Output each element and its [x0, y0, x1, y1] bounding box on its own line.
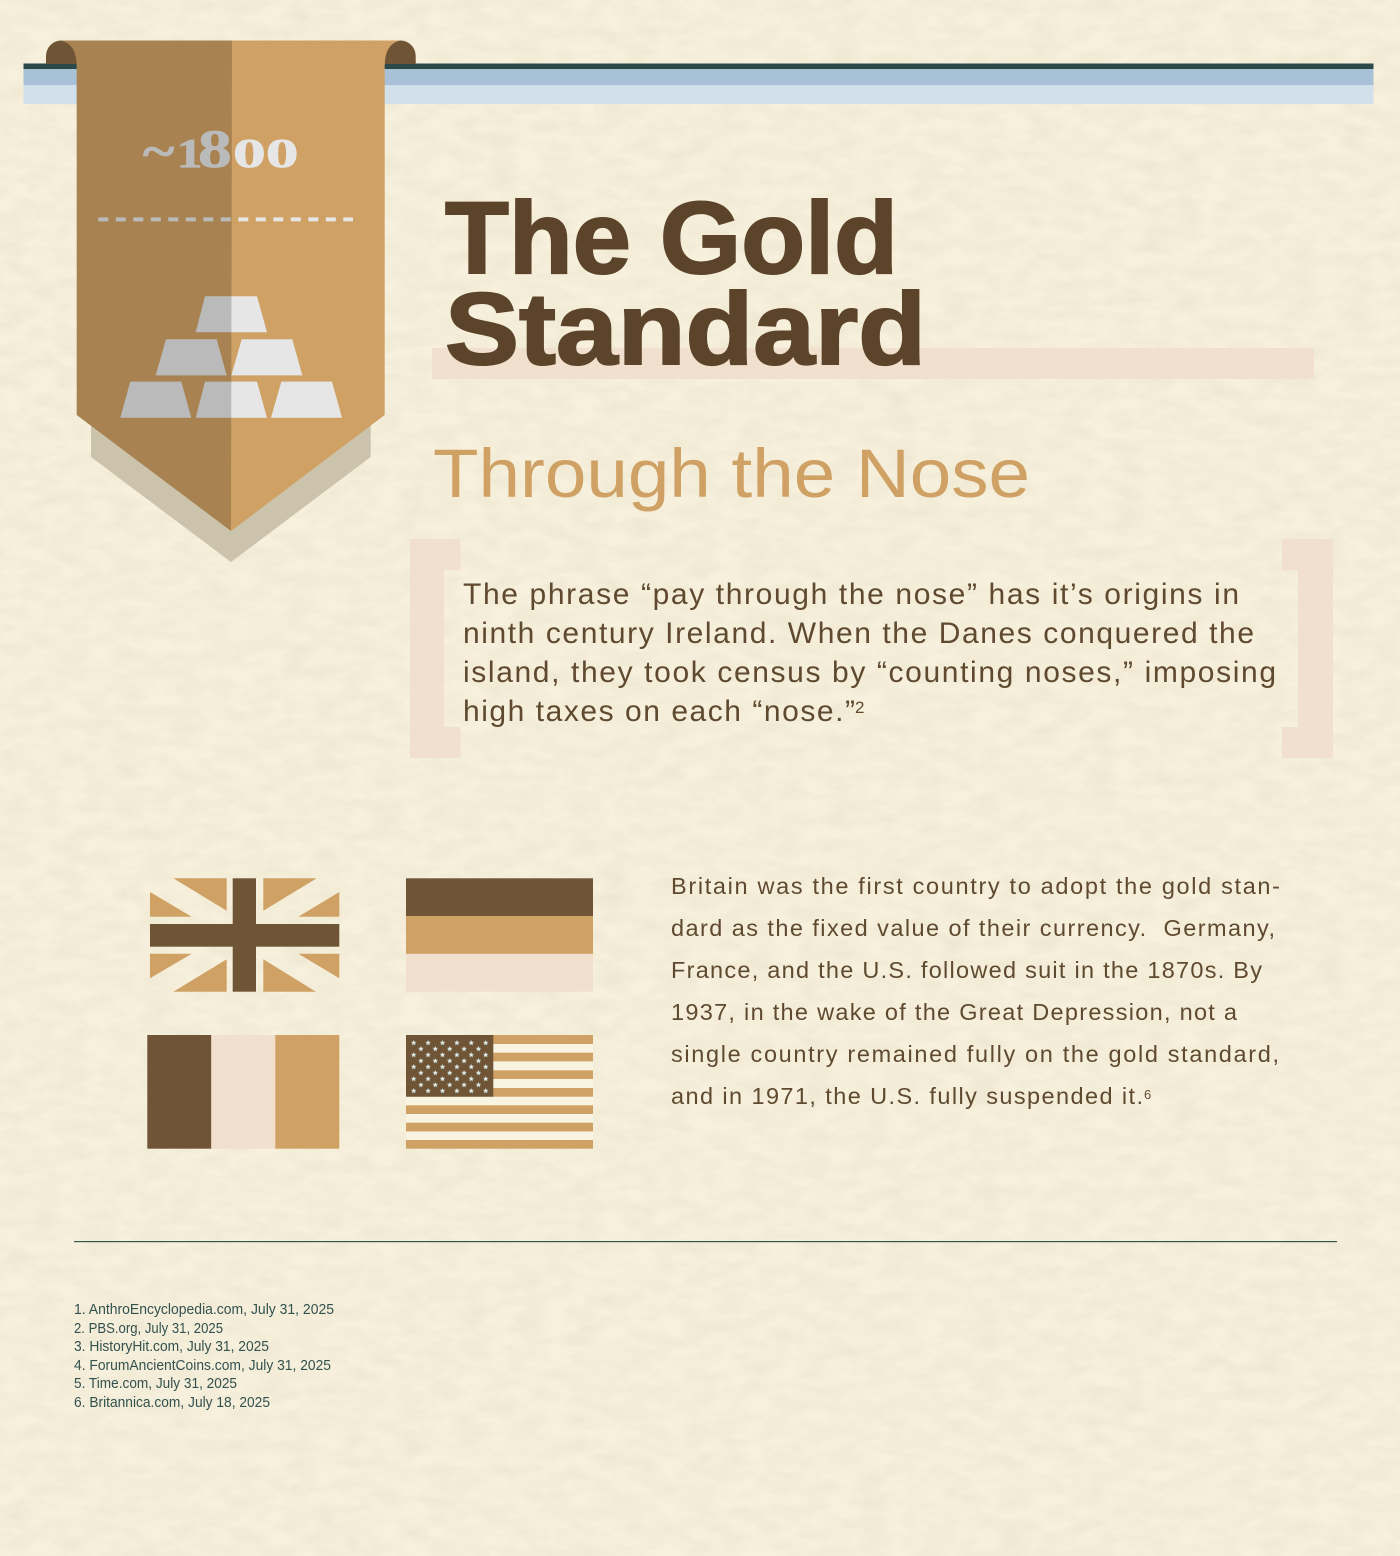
flag: Germany: [406, 878, 593, 992]
banner left half shade: [61, 40, 232, 531]
year label: ~: [143, 125, 174, 178]
history paragraph: 1937, in the wake of the Great Depression, not a: [671, 999, 1238, 1025]
history paragraph: France, and the U.S. followed suit in the 1870s. By: [671, 957, 1262, 983]
quote text: The phrase “pay through the nose” has it’s origins in: [463, 578, 1239, 611]
left bracket: [410, 539, 460, 758]
banner shadow: [91, 420, 371, 562]
history paragraph: [671, 873, 1280, 1109]
right bracket: [1282, 539, 1333, 758]
banner body: [61, 40, 400, 531]
title: [445, 181, 926, 386]
year label: 8: [198, 120, 232, 179]
sources list: 5. Time.com, July 31, 2025: [74, 1376, 237, 1392]
title: Standard: [445, 272, 926, 386]
banner fold caps: [46, 40, 416, 64]
flag: Britain: [150, 878, 339, 992]
flag: France: [147, 1035, 339, 1149]
quote text: 2: [855, 698, 864, 717]
history paragraph: single country remained fully on the gold standard,: [671, 1041, 1279, 1067]
quote panel: [410, 539, 1333, 758]
title underline bar: [432, 348, 1314, 379]
quote text: high taxes on each “nose.”: [463, 695, 855, 728]
sources list: 2. PBS.org, July 31, 2025: [74, 1321, 223, 1337]
subtitle: Through the Nose: [433, 435, 1030, 512]
quote text: [463, 578, 1276, 728]
flag: United States: [406, 1035, 593, 1149]
quote text: ninth century Ireland. When the Danes conquered the: [463, 617, 1254, 650]
quote text: island, they took census by “counting noses,” imposing: [463, 656, 1276, 689]
sources list: 4. ForumAncientCoins.com, July 31, 2025: [74, 1358, 331, 1374]
history paragraph: and in 1971, the U.S. fully suspended it.: [671, 1083, 1143, 1109]
header ribbon stripes: [24, 64, 1374, 104]
footer rule: [74, 1241, 1337, 1242]
sources list: 6. Britannica.com, July 18, 2025: [74, 1395, 270, 1411]
history paragraph: dard as the fixed value of their currency. Germany,: [671, 915, 1275, 941]
year label: 1: [177, 132, 202, 177]
title: The Gold: [445, 181, 898, 295]
dashed divider: [98, 217, 353, 221]
year label: 00: [233, 130, 299, 176]
history paragraph: Britain was the first country to adopt the gold stan-: [671, 873, 1280, 899]
history paragraph: 6: [1144, 1087, 1151, 1102]
icon: gold bars: [120, 296, 342, 418]
sources list: 3. HistoryHit.com, July 31, 2025: [74, 1339, 269, 1355]
flags: [147, 878, 593, 1149]
banner: ~1800 gold bars: [46, 40, 416, 562]
year label: [143, 120, 299, 179]
sources list: 1. AnthroEncyclopedia.com, July 31, 2025: [74, 1302, 334, 1318]
sources list: [74, 1302, 334, 1411]
